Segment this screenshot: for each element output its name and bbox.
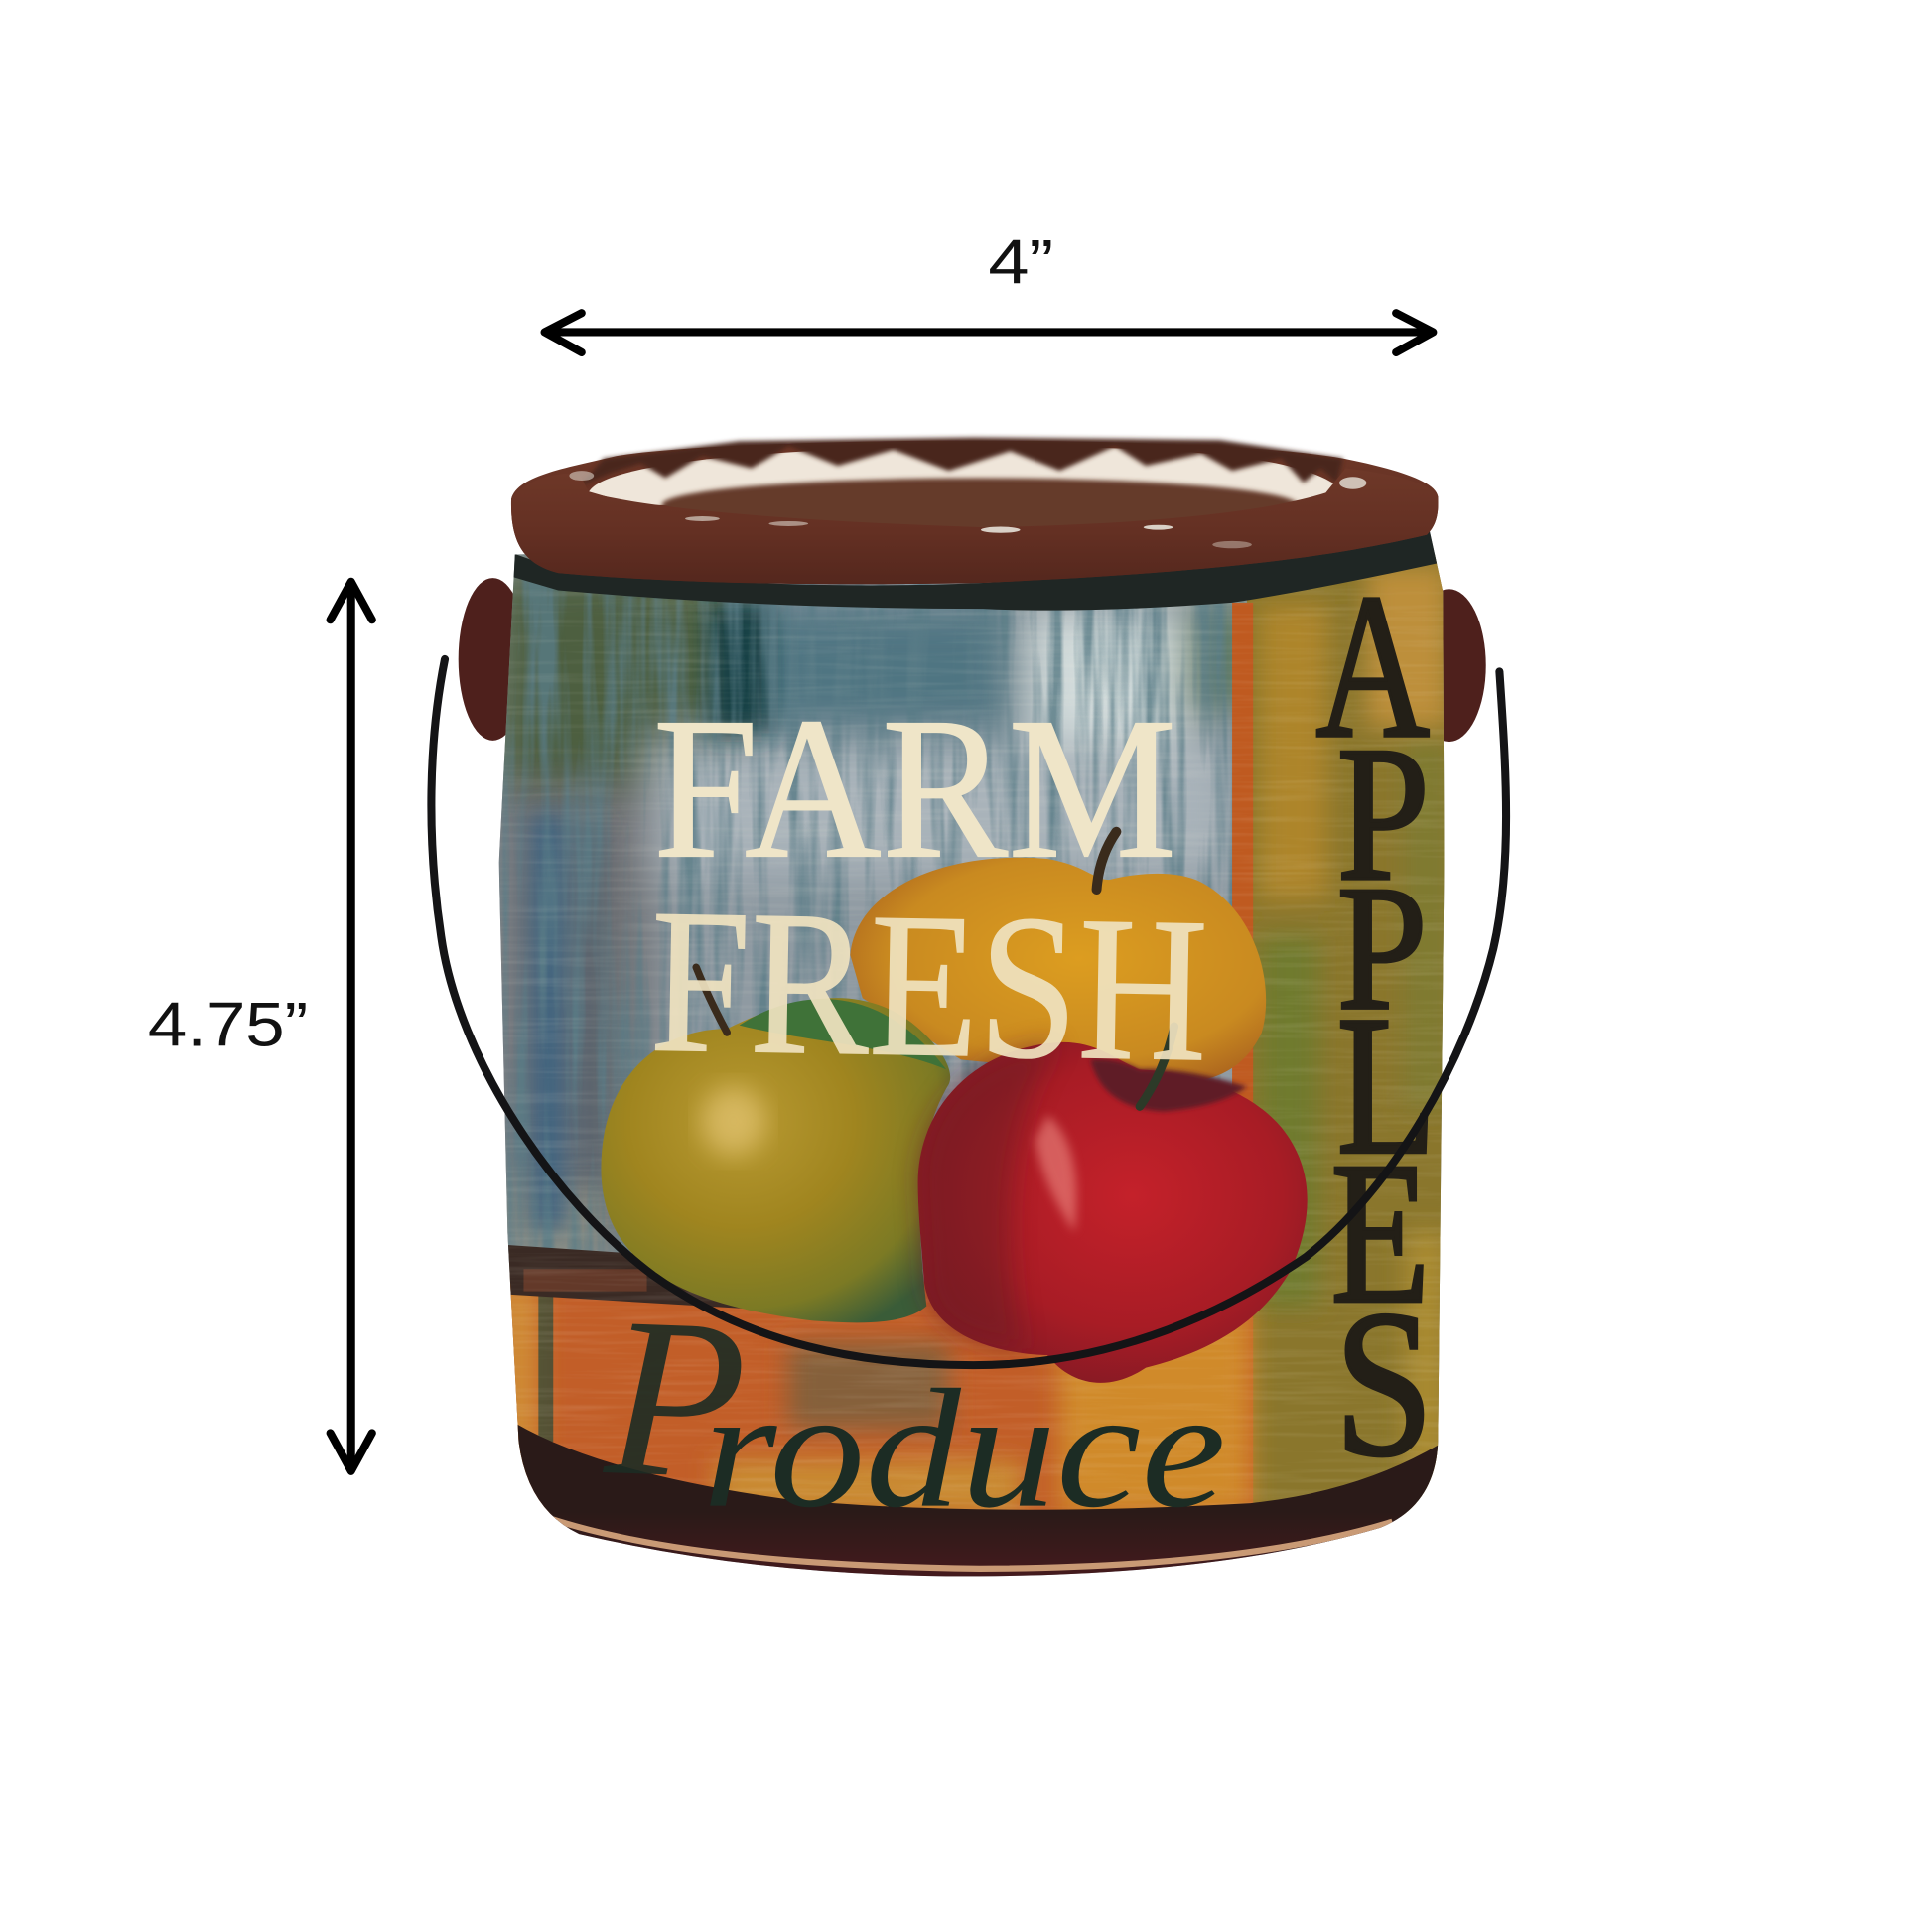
painted word: APPLES: A [1315,552,1430,781]
painted word: APPLES: E [1330,1121,1430,1346]
green leaf tint [740,999,946,1069]
red apple hollow [1090,1059,1247,1111]
apple: yellow [850,858,1266,1082]
rim front lip [511,469,1439,584]
base sliver [548,1518,1392,1569]
jar interior [661,479,1298,532]
height label: 4.75” [148,991,308,1060]
apple stem: yellow [1097,832,1116,890]
jar label body [492,523,1453,1589]
painted word: APPLES: S [1334,1269,1434,1500]
painted word: Produce [600,1269,1226,1544]
dark decorative band [508,1245,743,1309]
top dark band [514,532,1438,611]
rim worn specks [569,471,1366,548]
width label: 4” [988,227,1053,297]
apple: green [601,998,950,1322]
rim silhouette [511,441,1439,584]
lower orange panel [492,1282,1253,1516]
painted title: FARM: FARM [653,677,1176,901]
streak texture [492,579,1244,1269]
jar rim [511,438,1439,584]
painted word: APPLES [1315,552,1437,1500]
painted title: FRESH: FRESH [648,867,1209,1105]
bottom dark band [518,1424,1438,1577]
green apple highlight [701,1087,765,1156]
width dimension arrow [545,313,1433,352]
painted word: Produce: roduce [702,1355,1226,1544]
apple: red [918,1027,1308,1383]
jar side ears [459,578,1486,742]
label base colours [492,530,1453,1589]
apple stem: green [696,967,727,1033]
rim inner cream [589,446,1343,505]
red apple highlight [1035,1115,1076,1232]
apple stem: red [1140,1027,1174,1106]
painted word: Produce: P [600,1269,750,1527]
weave texture [492,579,1453,1516]
painted word: APPLES: L [1337,975,1437,1195]
painted word: APPLES: P [1337,850,1428,1047]
right column panel [1232,554,1450,1516]
rim chipped glaze [579,438,1343,486]
red apple shading [918,1042,1059,1349]
candle jar [431,438,1506,1589]
painted word: APPLES: P [1337,708,1430,921]
height dimension arrow [331,582,372,1471]
wire handle [431,659,1506,1365]
